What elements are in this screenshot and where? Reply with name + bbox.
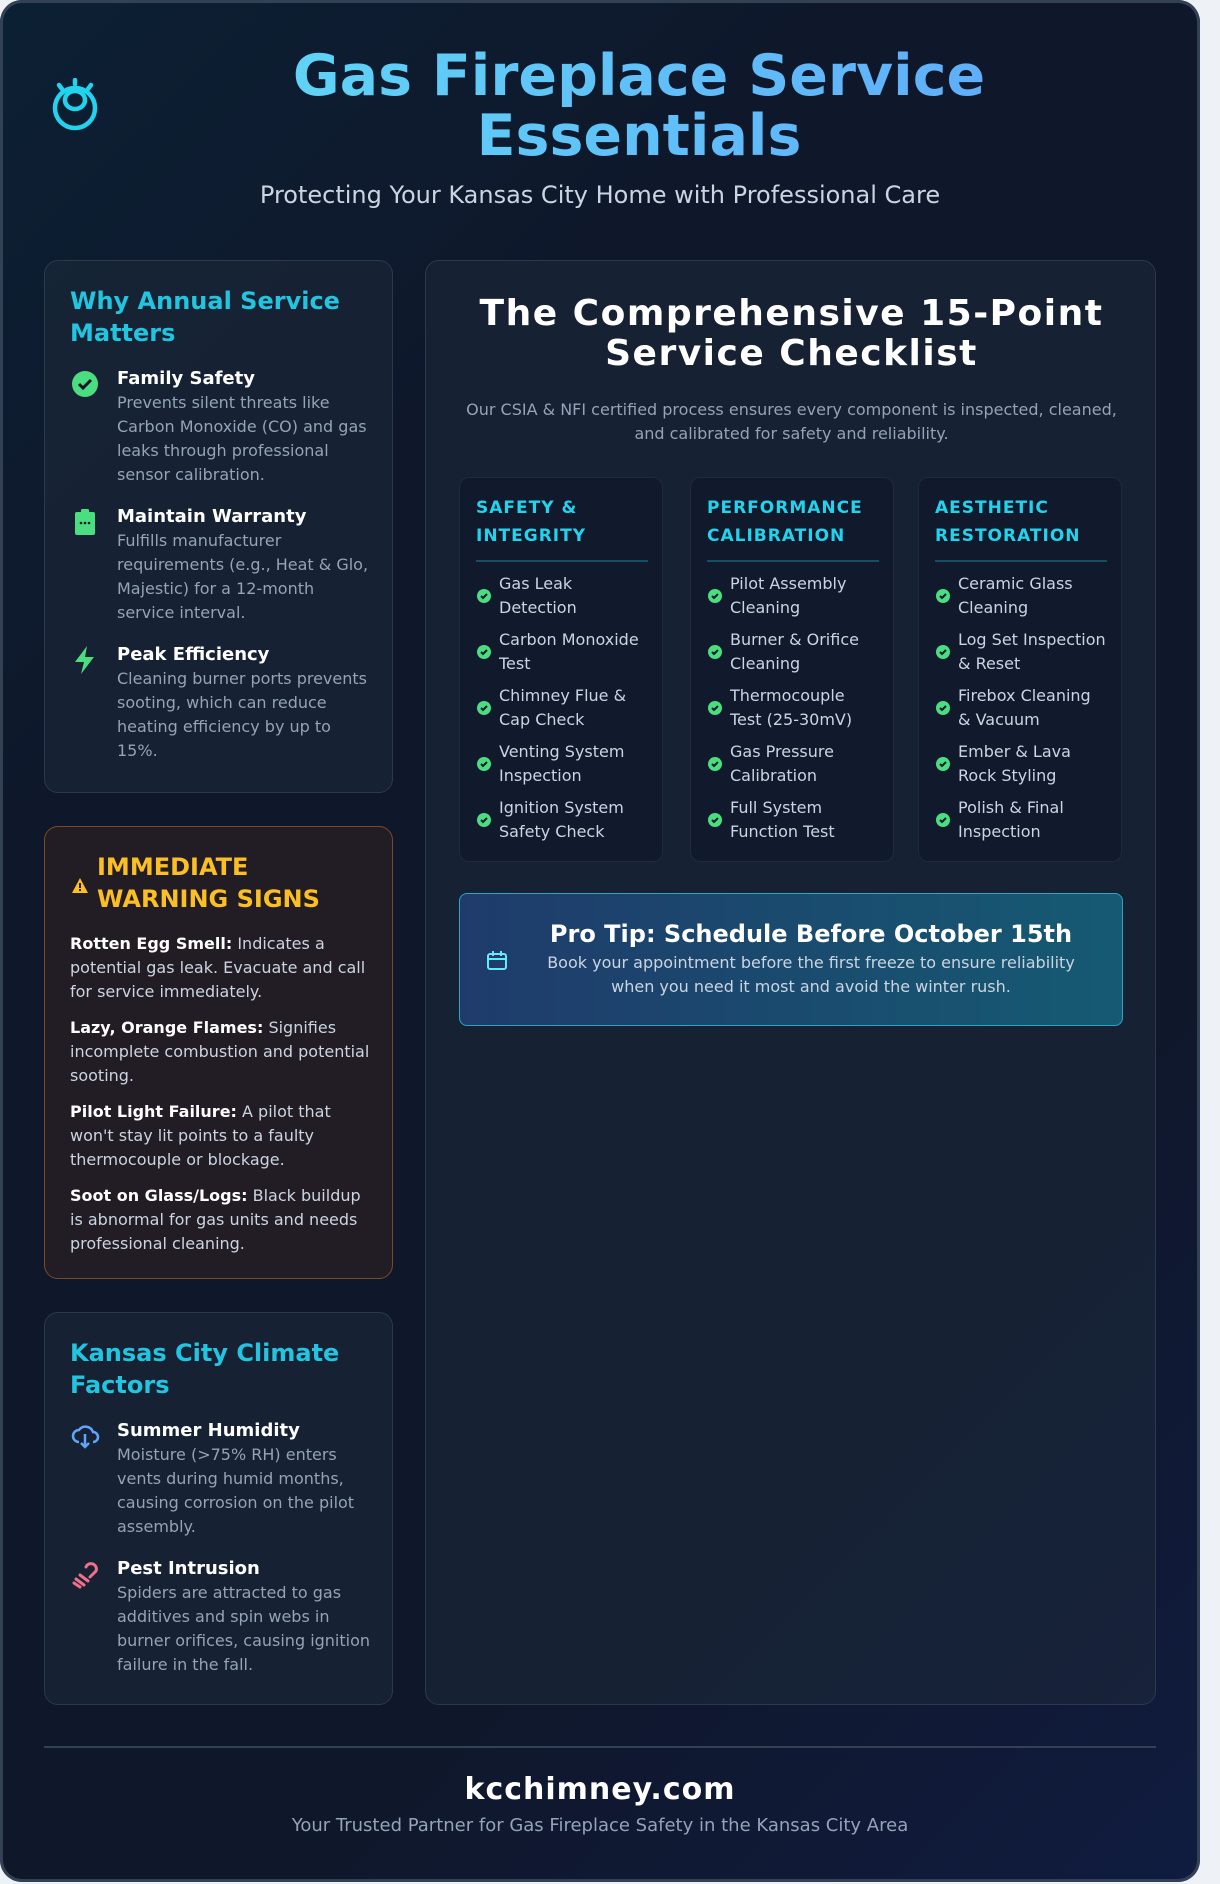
title: Gas Fireplace Service <box>293 43 985 109</box>
item: family safety <box>72 368 367 484</box>
sub-panel: safety <box>459 477 663 862</box>
sub-panel: performance: Full System Function Test <box>730 798 835 841</box>
item: efficiency <box>75 644 367 760</box>
subtitle: Protecting Your Kansas City Home with Professional Care <box>260 181 940 209</box>
item: warranty: Fulfills manufacturer requirements (e.g., Heat & Glo, Majestic) for a 12-month service interval. <box>117 531 368 622</box>
text: warning list <box>70 934 369 1253</box>
sub-panel: performance: PERFORMANCE <box>707 498 863 518</box>
heading <box>70 287 340 347</box>
sub-panel: performance <box>690 477 894 862</box>
icon: clipboard <box>75 509 95 535</box>
panel: why annual service matters <box>44 260 393 793</box>
sub-panel: safety: SAFETY & <box>476 498 577 518</box>
item: family safety: Family Safety <box>117 368 255 389</box>
heading: WARNING SIGNS <box>97 885 320 913</box>
sub-panel: aesthetic: RESTORATION <box>935 526 1081 546</box>
icon: warning <box>72 878 88 893</box>
footer: website: kcchimney.com <box>464 1772 735 1807</box>
sub-panel: safety: Venting System Inspection <box>499 742 624 785</box>
item: humidity: Moisture (>75% RH) enters vents during humid months, causing corrosion on the pilot assembly. <box>117 1445 354 1536</box>
sub-panel: aesthetic: Firebox Cleaning & Vacuum <box>958 686 1091 729</box>
heading: Factors <box>70 1371 170 1399</box>
panel: warning signs <box>44 826 393 1279</box>
heading: Kansas City Climate <box>70 1339 339 1367</box>
icon: check <box>72 371 98 397</box>
text: warning list: Soot on Glass/Logs: Black buildup is abnormal for gas units and needs professional cleaning. <box>70 1186 361 1253</box>
item: efficiency: Cleaning burner ports prevents sooting, which can reduce heating efficiency by up to 15%. <box>117 669 367 760</box>
sub-panel: safety: Gas Leak Detection <box>499 574 577 617</box>
sub-panel: performance: Pilot Assembly Cleaning <box>730 574 846 617</box>
sub-panel: aesthetic: AESTHETIC <box>935 498 1049 518</box>
sub-panel: safety: INTEGRITY <box>476 526 586 546</box>
heading <box>72 853 320 913</box>
title: Essentials <box>477 103 801 169</box>
item: warranty <box>75 506 368 622</box>
icon: calendar <box>487 951 507 970</box>
heading: Service Checklist <box>605 333 978 374</box>
item: pests <box>72 1558 370 1674</box>
heading <box>480 293 1103 374</box>
item: warranty: Maintain Warranty <box>117 506 306 527</box>
sub-panel: safety: Carbon Monoxide Test <box>499 630 639 673</box>
text: pro tip: Book your appointment before the first freeze to ensure reliability when you need it most and avoid the winter rush. <box>547 953 1075 996</box>
icon: bolt <box>75 646 94 674</box>
heading: Matters <box>70 319 175 347</box>
panel: 15-point checklist <box>425 260 1156 1705</box>
sub-panel: performance: Thermocouple Test (25-30mV) <box>730 686 852 729</box>
text: intro: Our CSIA & NFI certified process ensures every component is inspected, cleaned, and calibrated for safety and reliability. <box>466 400 1117 443</box>
icon: cloud <box>72 1425 100 1449</box>
item: pests: Pest Intrusion <box>117 1558 260 1579</box>
sub-panel: safety: Chimney Flue & Cap Check <box>499 686 626 729</box>
item: efficiency: Peak Efficiency <box>117 644 269 665</box>
sub-panel: performance: Gas Pressure Calibration <box>730 742 834 785</box>
sub-panel: aesthetic: Ceramic Glass Cleaning <box>958 574 1073 617</box>
text: warning list: Pilot Light Failure: A pilot that won't stay lit points to a faulty thermocouple or blockage. <box>70 1102 331 1169</box>
sub-panel: aesthetic: Log Set Inspection & Reset <box>958 630 1106 673</box>
text: pro tip: Pro Tip: Schedule Before October 15th <box>550 920 1072 948</box>
item: humidity: Summer Humidity <box>117 1420 300 1441</box>
item: family safety: Prevents silent threats like Carbon Monoxide (CO) and gas leaks through professional sensor calibration. <box>117 393 367 484</box>
sub-panel: aesthetic: Polish & Final Inspection <box>958 798 1064 841</box>
sub-panel: safety: Ignition System Safety Check <box>499 798 624 841</box>
heading: Why Annual Service <box>70 287 340 315</box>
heading <box>70 1339 339 1399</box>
icon: pest tool <box>72 1562 98 1589</box>
title <box>119 46 1159 166</box>
item: pests: Spiders are attracted to gas additives and spin webs in burner orifices, causing ignition failure in the fall. <box>117 1583 370 1674</box>
item: humidity <box>72 1420 354 1536</box>
sub-panel: performance: CALIBRATION <box>707 526 845 546</box>
footer: tagline: Your Trusted Partner for Gas Fireplace Safety in the Kansas City Area <box>292 1815 908 1836</box>
sub-panel: performance: Burner & Orifice Cleaning <box>730 630 859 673</box>
text: warning list: Lazy, Orange Flames: Signifies incomplete combustion and potential sooting. <box>70 1018 369 1085</box>
heading: The Comprehensive 15-Point <box>480 293 1103 334</box>
heading: IMMEDIATE <box>97 853 248 881</box>
text: warning list: Rotten Egg Smell: Indicates a potential gas leak. Evacuate and call for service immediately. <box>70 934 365 1001</box>
text: pro tip <box>547 920 1075 996</box>
callout: pro tip <box>459 893 1123 1026</box>
sub-panel: aesthetic: Ember & Lava Rock Styling <box>958 742 1071 785</box>
sub-panel: aesthetic <box>918 477 1122 862</box>
icon: fireplace logo <box>52 78 98 130</box>
panel: climate factors <box>44 1312 393 1705</box>
